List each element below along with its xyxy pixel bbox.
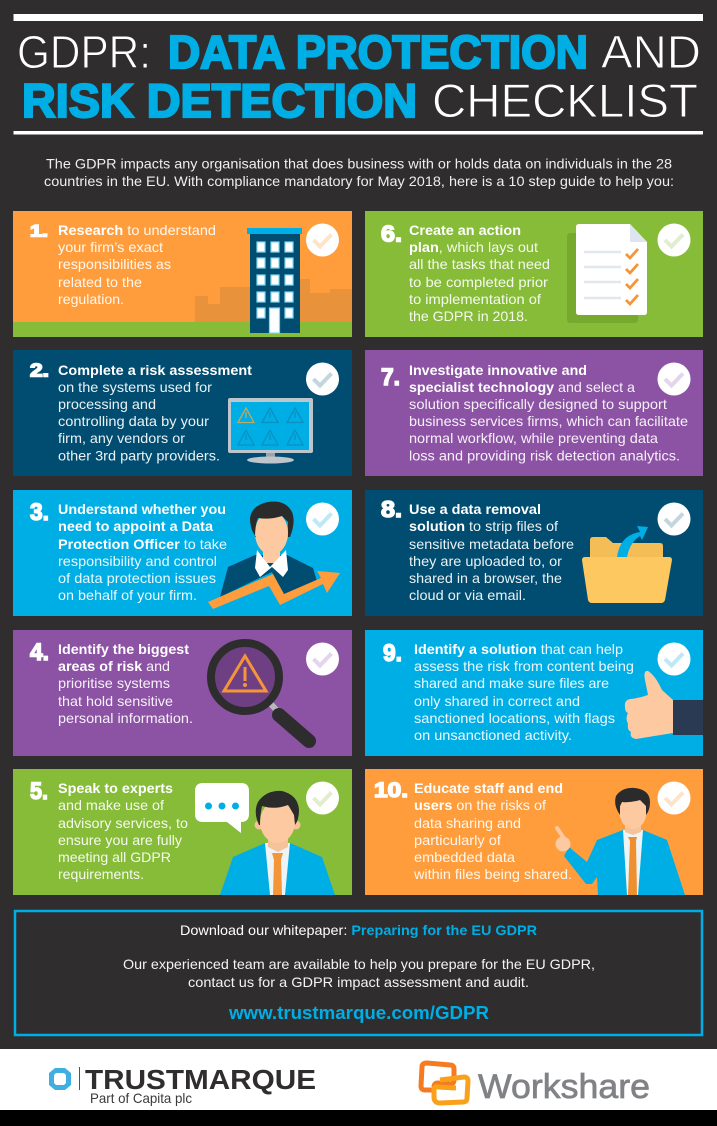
title line 2 (22, 74, 698, 127)
title block (14, 14, 703, 134)
step text (58, 222, 216, 307)
step text: Understand whether you (58, 501, 226, 517)
panel: step 3 data protection officer (13, 490, 352, 616)
logo: Workshare: Workshare (478, 1068, 650, 1106)
logo: Trustmarque (49, 1064, 316, 1106)
step text: processing and (58, 396, 156, 412)
step text: plan, which lays out (409, 239, 538, 255)
step text: and make use of (58, 797, 164, 813)
panel: step 10 educate staff (365, 769, 703, 895)
step text: Complete a risk assessment (58, 362, 252, 378)
step text: on unsanctioned activity. (414, 727, 572, 743)
title line 1 (17, 26, 701, 78)
panel: step 5 speak to experts (13, 769, 352, 895)
icon: pointing businessman (556, 788, 685, 895)
panel: step 7 specialist technology (365, 350, 703, 476)
icon: check badge (306, 502, 339, 536)
step text: all the tasks that need (409, 256, 550, 272)
step text: specialist technology and select a (409, 379, 635, 395)
panel: step 2 risk assessment (13, 350, 352, 476)
step text: personal information. (58, 710, 193, 726)
step text: Identify a solution that can help (414, 641, 623, 657)
step text: to implementation of (409, 291, 541, 307)
step text: Speak to experts (58, 780, 173, 796)
step number: 8. (381, 496, 402, 522)
icon: magnifier with warning (211, 643, 309, 741)
step text: on the systems used for (58, 379, 212, 395)
step text: firm, any vendors or (58, 430, 185, 446)
step text: within files being shared. (413, 866, 572, 882)
icon: check badge (658, 782, 690, 814)
logo: Trustmarque: Part of Capita plc (90, 1090, 192, 1106)
panel: call to action (15, 911, 702, 1035)
step number: 9. (383, 640, 402, 667)
panel: step 4 biggest risks (13, 630, 352, 756)
step text: shared and make sure files are (414, 675, 609, 691)
step text: the GDPR in 2018. (409, 308, 528, 324)
step text: on behalf of your firm. (58, 587, 197, 603)
support text: Our experienced team are available to help you prepare for the EU GDPR, (123, 956, 595, 972)
step text (58, 501, 227, 603)
step text: meeting all GDPR (58, 849, 171, 865)
step text: your firm’s exact (58, 239, 163, 255)
step text: Investigate innovative and (409, 362, 587, 378)
step text: business services firms, which can facilitate (409, 413, 688, 429)
step text (409, 362, 688, 464)
icon: monitor with warnings (228, 398, 313, 464)
step text (409, 501, 574, 603)
step text: shared in a browser, the (409, 570, 562, 586)
step text (58, 780, 188, 882)
step text: responsibility and control (58, 553, 217, 569)
step text: ensure you are fully (58, 832, 182, 848)
step text (58, 641, 193, 726)
icon: check badge (306, 782, 339, 814)
step text: loss and providing risk detection analytics. (409, 448, 680, 464)
step text: regulation. (58, 291, 124, 307)
panel: step 8 data removal (365, 490, 703, 616)
step text (413, 780, 572, 882)
step text: sanctioned locations, with flags (414, 710, 615, 726)
step number: 4. (30, 639, 49, 666)
step text: Use a data removal (409, 501, 541, 517)
icon: businessman (220, 791, 335, 895)
title line 1: DATA PROTECTION (168, 26, 588, 78)
icon: checklist document (567, 224, 647, 323)
icon: businessman with rising arrow (208, 501, 340, 609)
step text: they are uploaded to, or (409, 553, 562, 569)
step text: embedded data (414, 849, 515, 865)
step number: 1. (30, 222, 48, 240)
step text: to be completed prior (409, 274, 548, 290)
step text: Identify the biggest (58, 641, 189, 657)
step text: assess the risk from content being (414, 658, 634, 674)
title line 1: AND (601, 26, 701, 78)
step text: of data protection issues (58, 570, 216, 586)
logo: Workshare (421, 1063, 650, 1106)
step number: 6. (381, 220, 402, 246)
step text (414, 641, 634, 743)
website link: www.trustmarque.com/GDPR (228, 1003, 489, 1023)
step text: data sharing and (414, 815, 521, 831)
icon: office building (195, 228, 352, 333)
icon: folder with upload arrow (582, 526, 672, 603)
step text: other 3rd party providers. (58, 448, 220, 464)
step text: controlling data by your (58, 413, 209, 429)
step number: 7. (381, 364, 400, 391)
step number: 3. (30, 499, 49, 526)
icon: check badge (658, 502, 690, 536)
icon: check badge (306, 224, 339, 256)
step text (58, 362, 252, 464)
step text: related to the (58, 274, 142, 290)
footer logos (0, 1049, 717, 1126)
intro text: countries in the EU. With compliance mandatory for May 2018, here is a 10 step guide to help you: (44, 173, 674, 189)
step text: cloud or via email. (409, 587, 526, 603)
icon: check badge (306, 642, 339, 676)
icon: speech bubble (195, 783, 249, 833)
intro text: The GDPR impacts any organisation that does business with or holds data on individuals in the 28 (46, 156, 672, 172)
panel: step 1 research (13, 211, 352, 337)
step number: 5. (30, 778, 48, 805)
icon: thumbs up (625, 671, 703, 739)
step text: prioritise systems (58, 675, 170, 691)
step text: solution specifically designed to support (409, 396, 667, 412)
step text: solution to strip files of (409, 518, 558, 534)
step text: requirements. (58, 866, 144, 882)
step text: users on the risks of (414, 797, 546, 813)
step text: areas of risk and (58, 658, 170, 674)
step text: need to appoint a Data (58, 518, 213, 534)
title line 2: CHECKLIST (432, 74, 698, 127)
step text: particularly of (414, 832, 501, 848)
step text: advisory services, to (58, 815, 188, 831)
icon: check badge (658, 642, 690, 676)
step text: Educate staff and end (414, 780, 563, 796)
step text: Research to understand (58, 222, 216, 238)
icon: check badge (658, 362, 690, 396)
step text: that hold sensitive (58, 693, 173, 709)
support text (123, 956, 595, 990)
step text: only shared in correct and (414, 693, 580, 709)
step number: 2. (30, 360, 49, 380)
step number: 10. (374, 779, 408, 802)
icon: check badge (306, 362, 339, 396)
step text: normal workflow, while preventing data (409, 430, 658, 446)
step text: responsibilities as (58, 256, 171, 272)
title line 1: GDPR: (17, 26, 151, 78)
icon: check badge (658, 224, 690, 256)
title line 2: RISK DETECTION (22, 74, 417, 127)
panel: step 6 action plan (365, 211, 703, 337)
step text: Protection Officer to take (58, 536, 227, 552)
support text: contact us for a GDPR impact assessment and audit. (188, 974, 529, 990)
step text: sensitive metadata before (409, 536, 574, 552)
logo: Trustmarque: TRUSTMARQUE (85, 1064, 316, 1095)
step text: Create an action (409, 222, 521, 238)
intro text (44, 156, 674, 189)
whitepaper line: Download our whitepaper: Preparing for the EU GDPR (180, 922, 537, 938)
panel: step 9 assess risk (365, 630, 703, 756)
step text (409, 222, 550, 324)
